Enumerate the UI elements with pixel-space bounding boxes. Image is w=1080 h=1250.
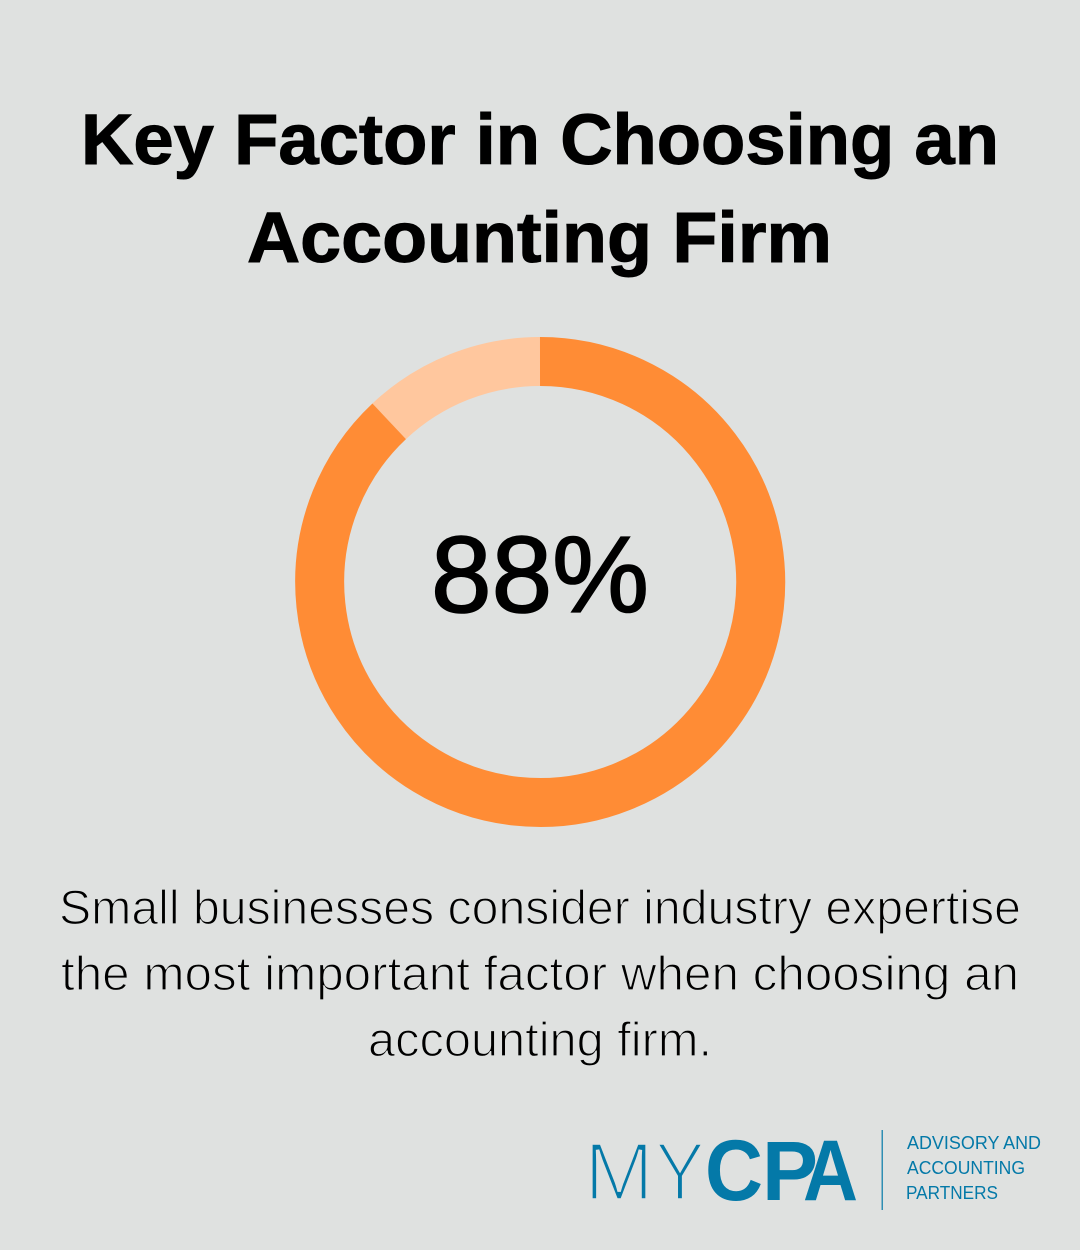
logo wordmark: A <box>803 1123 858 1219</box>
logo wordmark: P <box>762 1124 818 1218</box>
logo tagline: PARTNERS <box>906 1183 998 1203</box>
logo: MYCPA advisory and accounting partners <box>584 1123 1041 1219</box>
88% segment <box>320 361 761 802</box>
title: Key Factor in Choosing an <box>81 101 999 180</box>
logo wordmark: C <box>705 1123 763 1219</box>
logo tagline: ADVISORY AND <box>907 1133 1041 1153</box>
description text: Small businesses consider industry expertise <box>59 882 1021 935</box>
description text <box>59 882 1021 1067</box>
donut chart: 88% <box>320 361 761 802</box>
title <box>81 101 999 278</box>
logo wordmark <box>584 1123 858 1219</box>
remaining 12% segment <box>389 362 540 421</box>
logo wordmark: Y <box>655 1125 705 1218</box>
logo wordmark: M <box>584 1125 654 1218</box>
description text: accounting firm. <box>368 1014 712 1067</box>
logo tagline <box>906 1133 1041 1203</box>
value: 88%: 88% <box>431 514 649 636</box>
logo divider <box>882 1130 883 1210</box>
logo tagline: ACCOUNTING <box>907 1158 1025 1178</box>
title: Accounting Firm <box>247 199 832 278</box>
description text: the most important factor when choosing an <box>61 948 1019 1001</box>
